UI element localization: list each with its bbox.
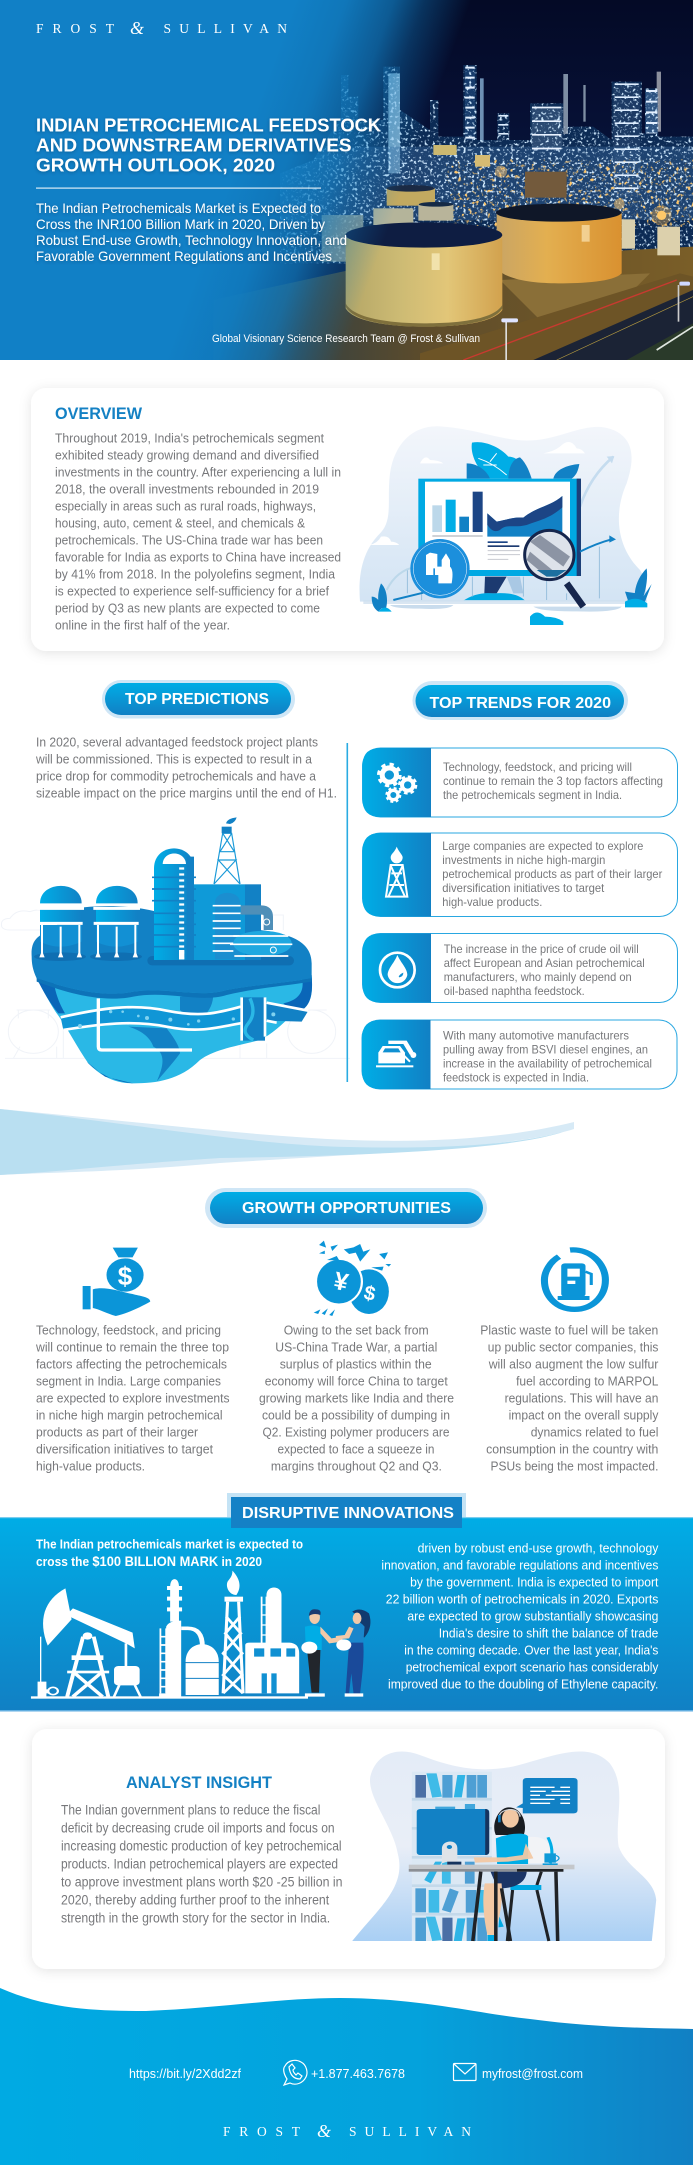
coffee cup (543, 1853, 558, 1865)
trend card 3 (362, 934, 678, 1002)
top predictions text: sizeable impact on the price margins until the end of H1. (36, 786, 337, 800)
opportunity 1 text (35, 1322, 230, 1474)
footer email: myfrost@frost.com (482, 2066, 583, 2081)
opportunity 2 text: expected to face a squeeze in (278, 1442, 434, 1456)
trend 2 text: Large companies are expected to explore (442, 839, 644, 853)
opportunity 1 text: are expected to explore investments (36, 1390, 230, 1406)
distillation tower (154, 848, 194, 960)
opportunity 1 text: products as part of their larger (36, 1424, 199, 1440)
title divider (36, 188, 321, 189)
icon: fuel pump ring (544, 1250, 605, 1309)
right text block: India's desire to shift the balance of trade (439, 1626, 658, 1640)
panel: opportunity 1 (35, 1248, 230, 1474)
icon: car and robot arm (376, 1041, 416, 1067)
analyst text: deficit by decreasing crude oil imports and focus on (61, 1821, 335, 1836)
overview text: is expected to experience self-sufficiency for a brief (55, 584, 329, 598)
right text block: in the coming decade. Over the last year, India's (404, 1642, 659, 1658)
opportunity 2 text: surplus of plastics within the (280, 1356, 432, 1372)
opportunity 3 text: impact on the overall supply (509, 1408, 659, 1422)
panel: analyst insight (32, 1729, 665, 1969)
right text block: improved due to the doubling of Ethylene capacity. (388, 1676, 658, 1692)
right text block: by the government. India is expected to import (410, 1574, 659, 1590)
speech bubble (516, 1778, 578, 1813)
trend 3 text: affect European and Asian petrochemical (444, 956, 645, 970)
opportunity 1 text: Technology, feedstock, and pricing (36, 1322, 221, 1338)
opportunity 3 text: Plastic waste to fuel will be taken (480, 1322, 658, 1338)
trend 3 text: The increase in the price of crude oil will (444, 942, 639, 956)
right text block: driven by robust end-use growth, technology (418, 1540, 659, 1556)
overview text: exhibited steady growing demand and diversified (55, 448, 319, 462)
heading: disruptive innovations: DISRUPTIVE INNOVATIONS (242, 1505, 454, 1522)
trend 1 text: continue to remain the 3 top factors affecting (443, 774, 663, 788)
overview text: housing, auto, cement & steel, and chemicals & (55, 516, 305, 530)
footer (0, 1988, 693, 2165)
icon: coins breaking (314, 1241, 391, 1316)
footer url: https://bit.ly/2Xdd2zf (129, 2066, 241, 2081)
trend 3 text: manufacturers, who mainly depend on (444, 970, 632, 984)
opportunity 1 text: segment in India. Large companies (36, 1374, 221, 1388)
icon: coins breaking: $ (362, 1282, 377, 1306)
top logo: SULLIVAN (164, 21, 287, 36)
opportunity 2 text: margins throughout Q2 and Q3. (271, 1458, 442, 1474)
blue fade overlay (0, 0, 464, 360)
trend 3 text: oil-based naphtha feedstock. (444, 984, 585, 998)
opportunity 2 text: Q2. Existing polymer producers are (262, 1424, 450, 1440)
derrick (214, 833, 240, 884)
opportunity 3 text: PSUs being the most impacted. (490, 1458, 658, 1474)
illustration: oil field and handshake (31, 1571, 370, 1699)
trend card 4 (362, 1020, 677, 1089)
heading: top trends (412, 681, 628, 720)
overview text: petrochemicals. The US-China trade war has been (55, 532, 323, 548)
subtitle: Favorable Government Regulations and Incentives (36, 249, 332, 264)
right text block (381, 1540, 659, 1692)
overview text: Throughout 2019, India's petrochemicals segment (55, 430, 324, 446)
pump jack (43, 1588, 72, 1646)
overview text (55, 430, 341, 632)
icon: phone bubble (284, 2060, 307, 2085)
trend card 1 (362, 748, 678, 817)
right text block: petrochemical export scenario has considerably (406, 1660, 659, 1674)
heading: growth opportunities: GROWTH OPPORTUNITIES (242, 1200, 451, 1217)
trend 1 text: the petrochemicals segment in India. (443, 788, 622, 802)
overview text: especially in areas such as rural roads, highways, (55, 498, 316, 514)
opportunity 3 text: dynamics related to fuel (531, 1424, 659, 1440)
analyst figure (494, 1807, 525, 1835)
top predictions text (35, 734, 337, 800)
right text block: 22 billion worth of petrochemicals in 2020. Exports (386, 1592, 659, 1606)
desk (409, 1865, 574, 1869)
plant and column (266, 1587, 281, 1645)
trend 1 text: Technology, feedstock, and pricing will (443, 760, 632, 774)
icon: oil drop (380, 953, 415, 987)
building (194, 884, 245, 960)
trend 2 text: high-value products. (442, 895, 542, 909)
icon: gas derrick (386, 847, 407, 897)
right text block: are expected to grow substantially showcasing (407, 1608, 658, 1624)
footer logo: FROST (223, 2124, 301, 2139)
bold market statement: cross the $100 BILLION MARK in 2020 (36, 1553, 262, 1569)
overview text: period by Q3 as new plants are expected to come (55, 600, 320, 616)
heading: top predictions: TOP PREDICTIONS (125, 691, 269, 708)
overview text: 2018, the overall investments rebounded in 2019 (55, 482, 319, 496)
heading: disruptive innovations (227, 1493, 466, 1528)
trend 4 text: pulling away from BSVI diesel engines, an (443, 1042, 648, 1056)
opportunity 3 text: up public sector companies, this (488, 1340, 659, 1354)
opportunity 3 text: regulations. This will have an (505, 1390, 658, 1406)
opportunity 1 text: diversification initiatives to target (36, 1442, 213, 1456)
opportunity 2 text: Owing to the set back from (284, 1322, 429, 1338)
opportunity 2 text: US-China Trade War, a partial (275, 1340, 437, 1354)
top logo: & (130, 18, 144, 38)
title: GROWTH OUTLOOK, 2020 (36, 154, 275, 176)
overview heading: OVERVIEW (55, 404, 143, 423)
decorative wave (0, 1109, 574, 1175)
icon: envelope (454, 2064, 476, 2080)
icon: hand holding money bag: $ (118, 1261, 133, 1291)
hero photo: refinery at night (186, 0, 693, 360)
hero banner (0, 0, 693, 360)
icon: coins breaking: ¥ (331, 1267, 351, 1297)
opportunity 1 text: factors affecting the petrochemicals (36, 1356, 227, 1372)
opportunity 2 text: growing markets like India and there (259, 1390, 454, 1406)
tank one (37, 886, 84, 957)
top predictions text: price drop for commodity petrochemicals and have a (36, 768, 317, 784)
tank two (93, 886, 140, 957)
panel: disruptive innovations (0, 1493, 693, 1712)
bold market statement (36, 1538, 303, 1569)
opportunity 3 text (480, 1322, 659, 1474)
panel: overview (31, 388, 664, 651)
analyst text (61, 1803, 342, 1926)
heading: top predictions (102, 680, 295, 718)
heading: top trends: TOP TRENDS FOR 2020 (430, 695, 611, 712)
trend card 2 (362, 833, 678, 916)
analyst text: strength in the growth story for the sector in India. (61, 1911, 330, 1926)
distillation column (170, 1579, 179, 1622)
analyst text: products. Indian petrochemical players are expected (61, 1857, 338, 1872)
trend 4 text: feedstock is expected in India. (443, 1070, 589, 1084)
subtitle (36, 201, 347, 264)
heading: growth opportunities (205, 1188, 487, 1228)
icon: hand holding money bag (83, 1248, 150, 1316)
credit line: Global Visionary Science Research Team @ Frost & Sullivan (212, 333, 480, 345)
right text block: innovation, and favorable regulations and incentives (381, 1558, 659, 1572)
overview text: favorable for India as exports to China have increased (55, 550, 341, 564)
panel: opportunity 2 (259, 1241, 454, 1474)
opportunity 2 text: could be a possibility of dumping in (262, 1408, 450, 1422)
illustration: floating refinery island (1, 817, 350, 1083)
woman figure (336, 1610, 370, 1697)
trend 3 text (444, 942, 645, 998)
top predictions text: will be commissioned. This is expected to result in a (35, 752, 313, 766)
trend 4 text: increase in the availability of petrochemical (443, 1056, 652, 1070)
opportunity 3 text: fuel according to MARPOL (516, 1374, 658, 1388)
analyst text: increasing domestic production of key petrochemical (61, 1839, 342, 1854)
top logo: FROST (36, 21, 115, 36)
illustration: dashboard and magnifier (360, 426, 652, 625)
title: INDIAN PETROCHEMICAL FEEDSTOCK (36, 114, 382, 136)
opportunity 3 text: consumption in the country with (486, 1442, 658, 1456)
title: AND DOWNSTREAM DERIVATIVES (36, 134, 352, 156)
top predictions text: In 2020, several advantaged feedstock project plants (36, 734, 318, 750)
footer logo: & (317, 2121, 331, 2141)
trend 2 text: petrochemical products as part of their larger (442, 867, 662, 881)
trend 2 text (442, 839, 662, 909)
trend 1 text (443, 760, 663, 802)
overview text: by 41% from 2018. In the polyolefins segment, India (55, 566, 336, 582)
trend 4 text: With many automotive manufacturers (443, 1028, 629, 1042)
icon: gears (379, 765, 415, 801)
footer phone: +1.877.463.7678 (311, 2066, 405, 2081)
man figure (301, 1609, 342, 1697)
analyst heading: ANALYST INSIGHT (126, 1773, 273, 1792)
divider between columns (346, 743, 348, 1082)
title (36, 114, 382, 176)
analyst text: The Indian government plans to reduce the fiscal (61, 1803, 320, 1818)
opportunity 3 text: will also augment the low sulfur (488, 1356, 659, 1372)
trend 2 text: investments in niche high-margin (442, 853, 605, 867)
overview text: investments in the country. After experiencing a lull in (55, 464, 341, 480)
illustration: analyst at desk (352, 1751, 656, 1941)
top logo (36, 22, 287, 34)
analyst text: 2020, thereby adding further proof to the inherent (61, 1893, 329, 1908)
subtitle: Cross the INR100 Billion Mark in 2020, Driven by (36, 217, 325, 232)
opportunity 2 text: economy will force China to target (265, 1374, 448, 1388)
opportunity 1 text: in niche high margin petrochemical (36, 1408, 223, 1422)
footer logo (223, 2121, 471, 2141)
panel: opportunity 3 (480, 1250, 659, 1474)
opportunity 2 text (259, 1322, 454, 1474)
subtitle: Robust End-use Growth, Technology Innovation, and (36, 233, 347, 248)
overview text: online in the first half of the year. (55, 618, 230, 632)
opportunity 1 text: will continue to remain the three top (35, 1340, 229, 1354)
small tank (233, 931, 292, 956)
footer logo: SULLIVAN (349, 2124, 471, 2139)
bold market statement: The Indian petrochemicals market is expected to (36, 1538, 303, 1552)
opportunity 1 text: high-value products. (36, 1458, 145, 1474)
trend 4 text (443, 1028, 652, 1084)
flare derrick (227, 1571, 240, 1595)
subtitle: The Indian Petrochemicals Market is Expected to (36, 201, 321, 216)
analyst text: to approve investment plans worth $20 -25 billion in (61, 1875, 342, 1890)
analyst chair (526, 1837, 552, 1863)
trend 2 text: diversification initiatives to target (442, 881, 605, 895)
